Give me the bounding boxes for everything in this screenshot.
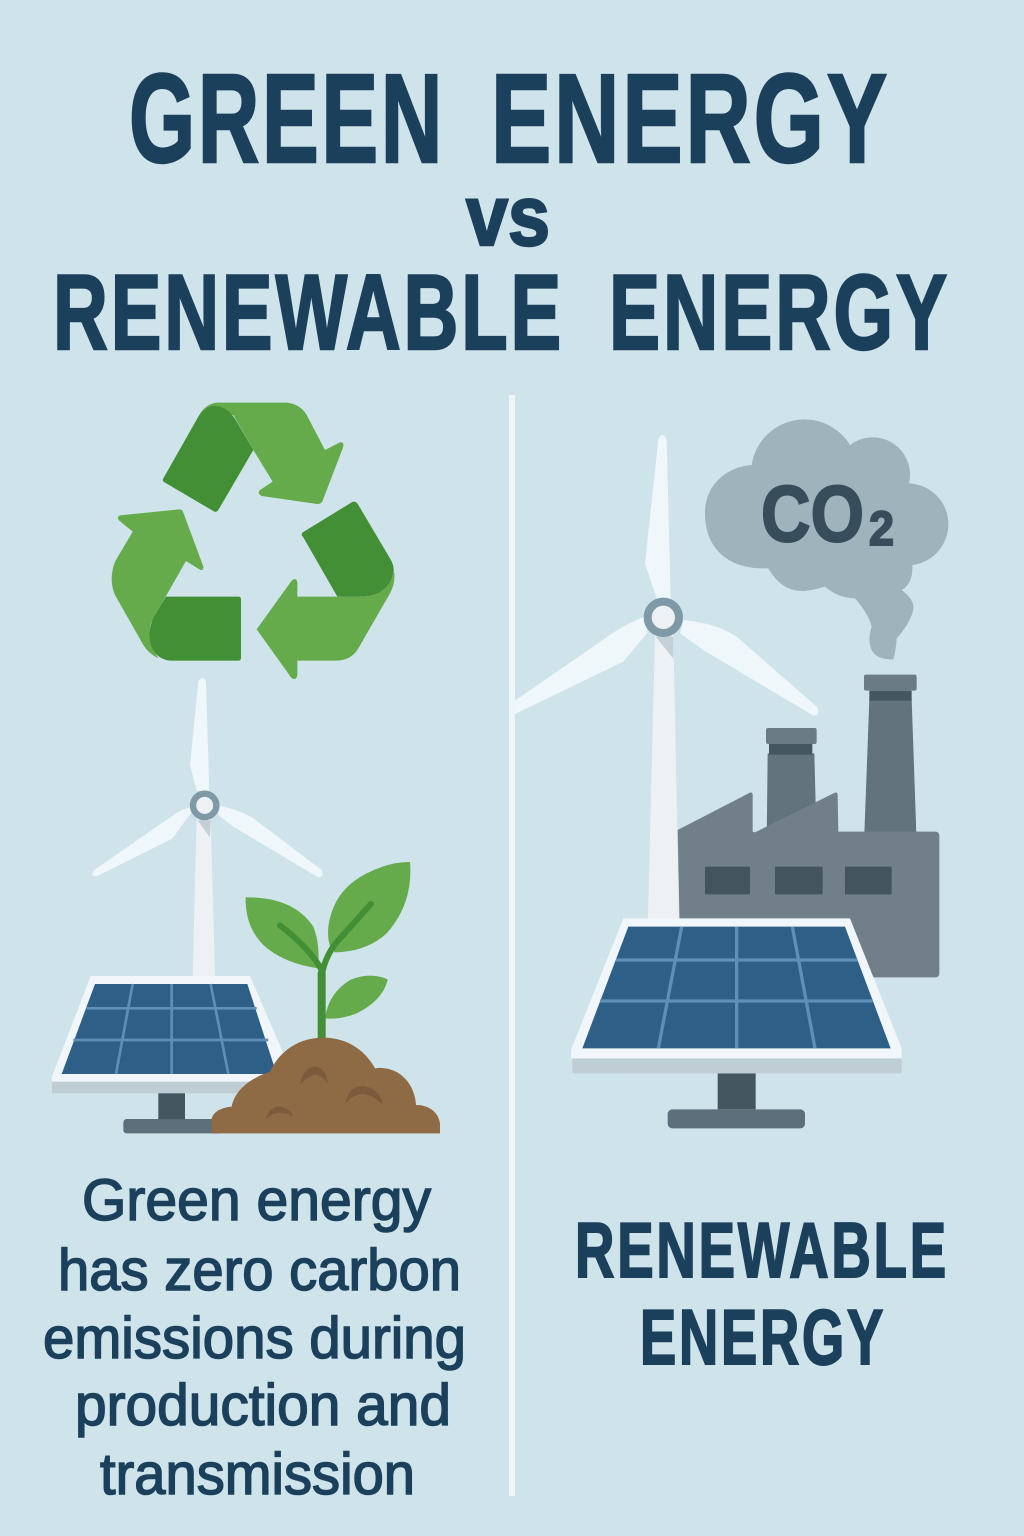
heading: renewable energy: ENERGY [640, 1293, 886, 1381]
text block: green energy description: transmission [100, 1442, 415, 1507]
icon: small wind turbine [92, 678, 323, 978]
icon: CO2 cloud [705, 419, 948, 659]
title: RENEWABLE [53, 252, 564, 372]
text block: green energy description: production and [75, 1373, 451, 1438]
text block: green energy description: has zero carbon [58, 1238, 461, 1303]
panel: green energy [43, 403, 466, 1507]
text block: green energy description: Green energy [82, 1168, 431, 1233]
icon: small solar panel [52, 976, 283, 1133]
icon: CO2 cloud: 2 [869, 503, 894, 556]
title [53, 48, 950, 372]
text block: green energy description: emissions during [43, 1306, 466, 1371]
icon: large solar panel [571, 918, 902, 1128]
icon: large wind turbine [515, 435, 819, 920]
title: GREEN [129, 48, 445, 189]
title: vs [466, 169, 550, 264]
icon: recycling symbol [112, 403, 394, 679]
panel: renewable energy [515, 419, 949, 1381]
icon: factory [678, 675, 939, 977]
icon: seedling in soil [212, 862, 440, 1133]
icon: CO2 cloud: CO [761, 469, 864, 558]
text block: green energy description [43, 1168, 466, 1507]
heading: renewable energy [575, 1206, 949, 1381]
